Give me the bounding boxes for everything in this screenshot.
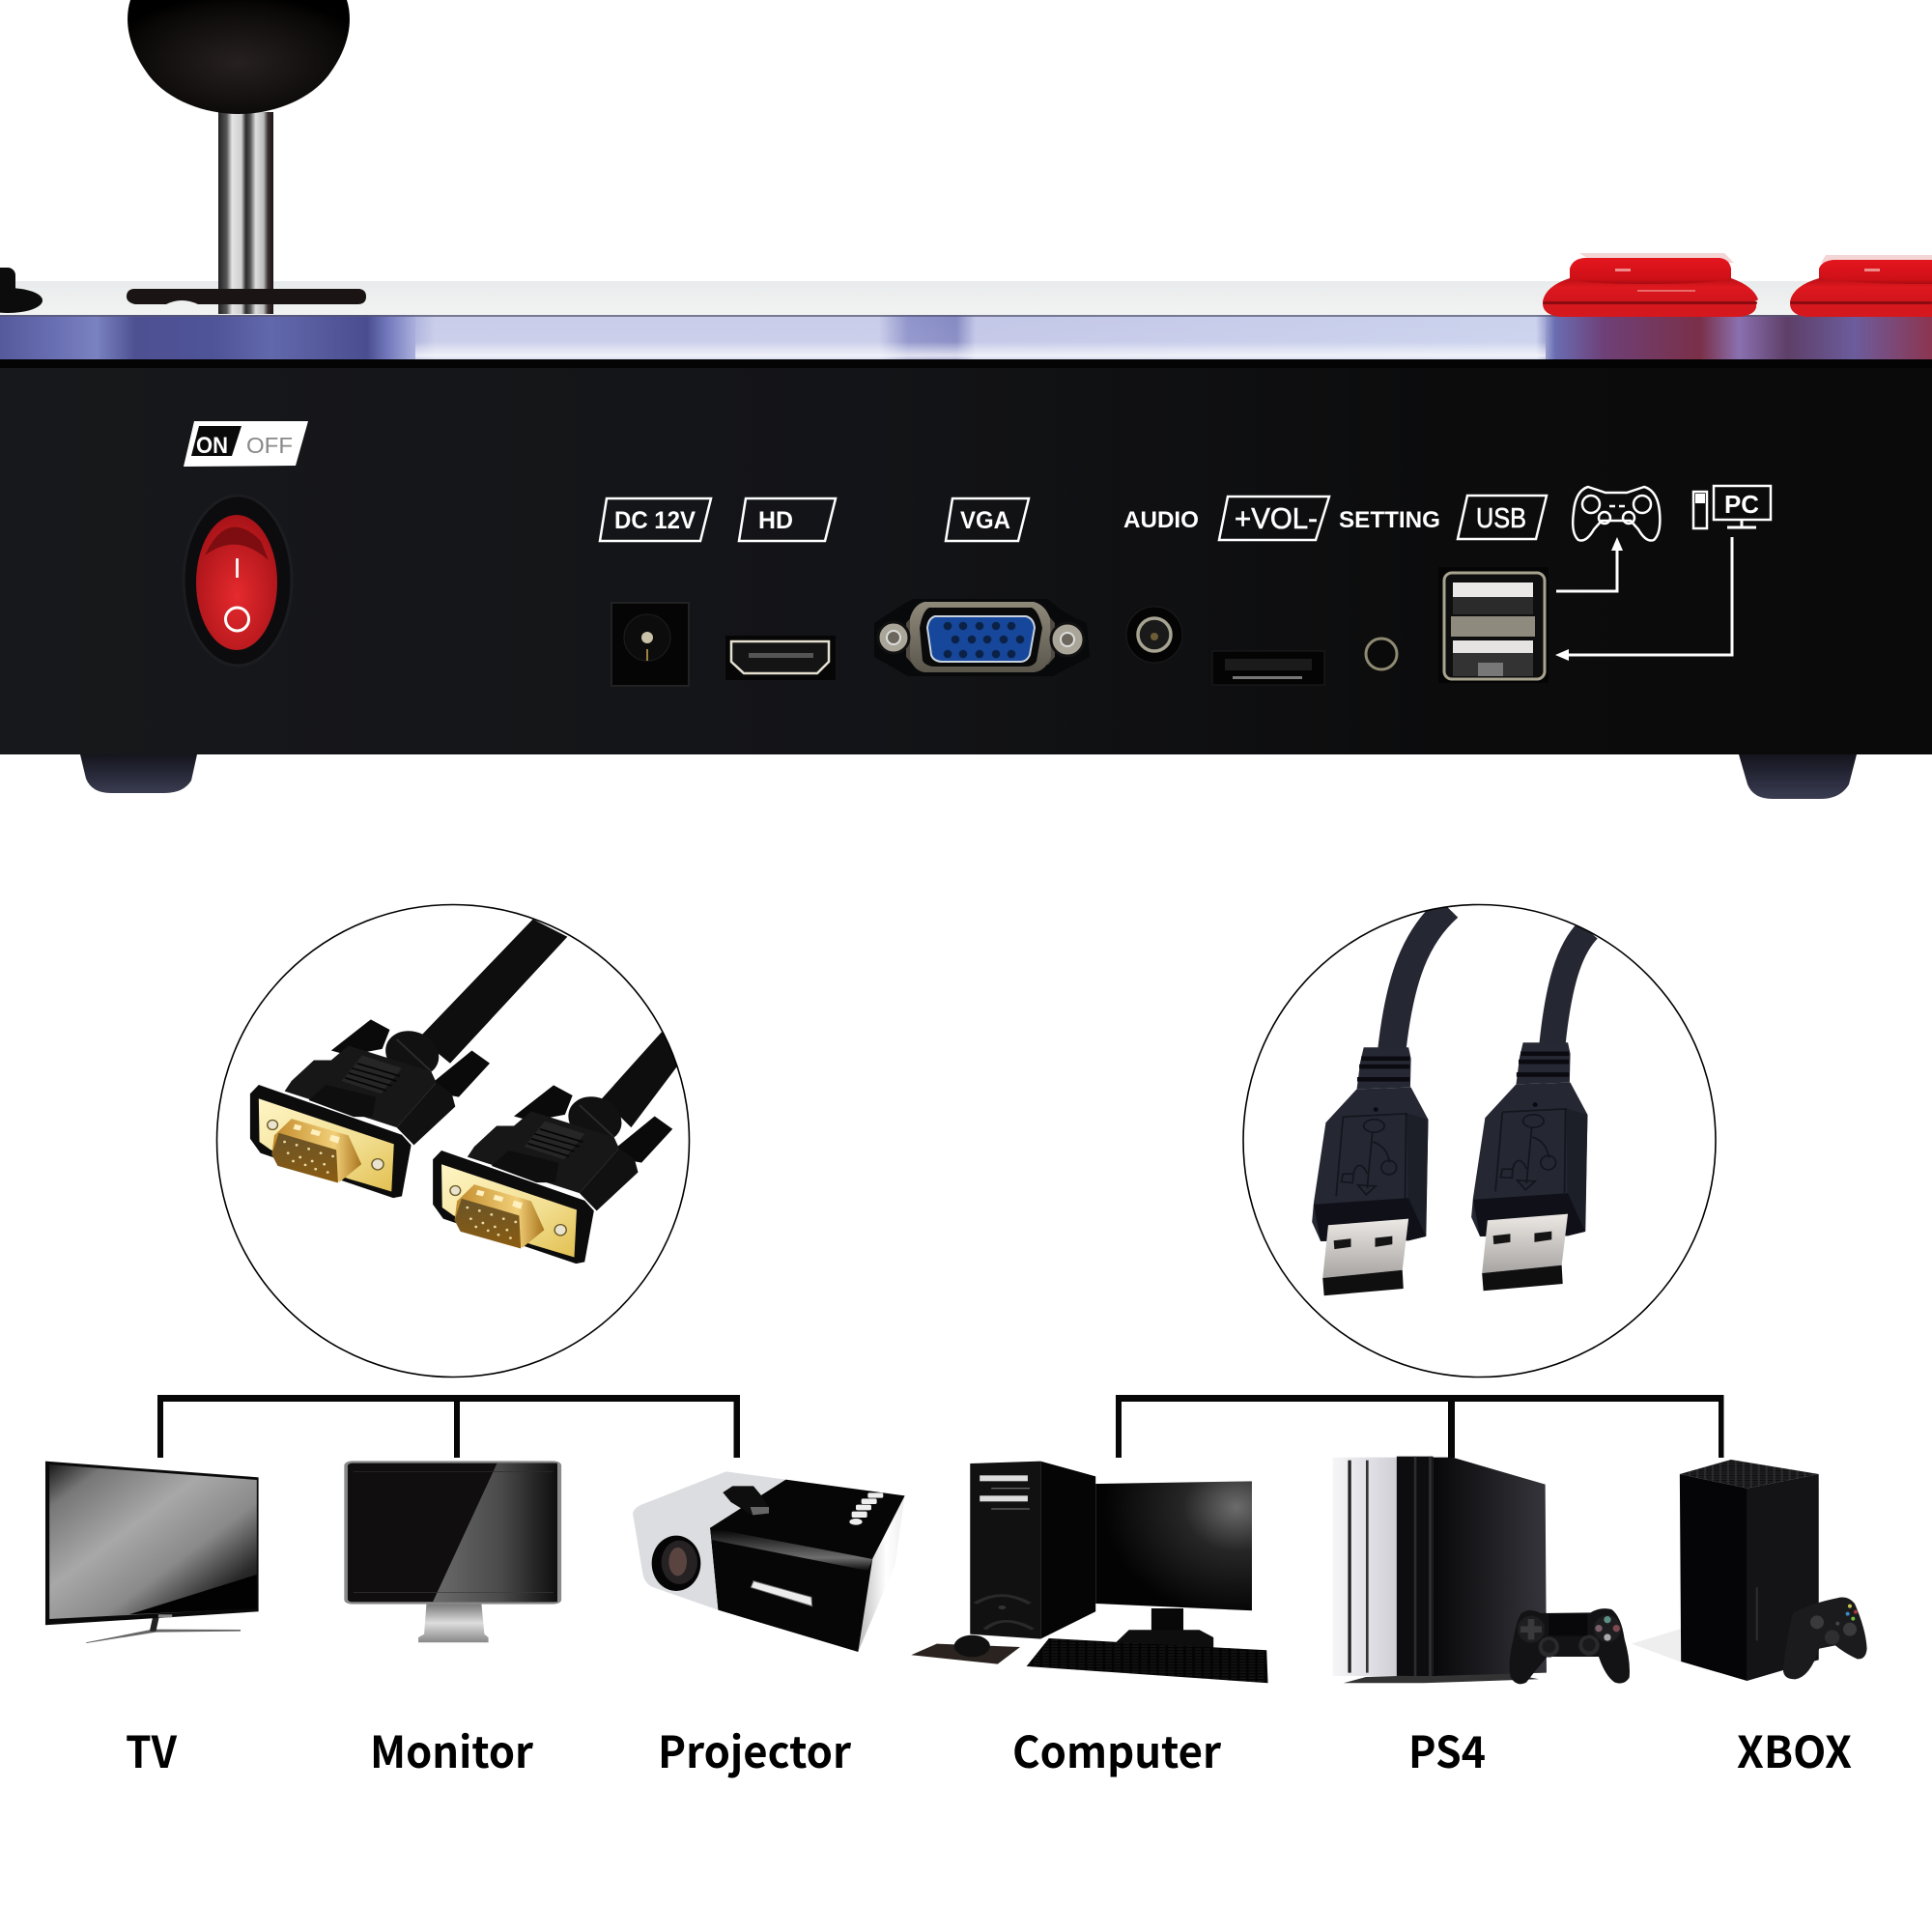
port: audio jack <box>1126 607 1182 663</box>
icon: gamepad <box>1573 487 1660 541</box>
first USB cable <box>1392 908 1448 1049</box>
on/off label: OFF <box>246 433 293 458</box>
top plate <box>0 281 1932 316</box>
bracket: USB devices <box>1116 1395 1723 1458</box>
icon: monitor <box>344 1461 561 1642</box>
USB cables image <box>1312 908 1588 1295</box>
PS4 controller <box>1509 1608 1630 1684</box>
icon: computer <box>911 1462 1268 1683</box>
label: VGA: VGA <box>960 507 1010 534</box>
label: SETTING: SETTING <box>1339 507 1440 533</box>
device icons: computer and consoles <box>911 1457 1819 1683</box>
port: setting hole <box>1366 639 1397 669</box>
first USB plug <box>1312 1047 1428 1295</box>
label: DC 12V: DC 12V <box>614 507 696 534</box>
port: VGA <box>874 599 1090 676</box>
label: Projector: Projector <box>658 1718 851 1780</box>
label: Computer: Computer <box>1012 1718 1221 1780</box>
projector white front <box>633 1471 785 1610</box>
circle outline <box>216 904 690 1378</box>
power rocker switch <box>184 496 292 666</box>
icon: PS4 console <box>1333 1457 1547 1683</box>
on/off label <box>184 421 308 467</box>
rubber feet <box>80 754 1857 799</box>
second USB cable <box>1552 930 1588 1044</box>
red arcade buttons <box>1543 253 1932 317</box>
projector black shell <box>710 1480 905 1652</box>
PS4 and XBOX controllers <box>1509 1597 1867 1684</box>
port: HDMI <box>725 636 836 680</box>
label: TV: TV <box>126 1718 178 1780</box>
joystick <box>127 0 366 314</box>
circle outline <box>1243 904 1716 1378</box>
label: HD <box>739 498 836 541</box>
label: Monitor: Monitor <box>370 1718 533 1780</box>
right foot <box>1739 754 1857 799</box>
button one <box>1543 253 1758 317</box>
small black button at left edge <box>0 268 43 313</box>
joystick shaft <box>218 112 273 314</box>
projector buttons <box>849 1492 883 1525</box>
device icons: TV and monitor <box>45 1461 561 1643</box>
label: USB <box>1458 496 1547 539</box>
joystick ball <box>128 0 350 114</box>
first VGA cable <box>419 920 567 1064</box>
label: DC 12V <box>600 498 711 541</box>
icon: TV <box>45 1462 259 1643</box>
projector highlight band <box>710 1528 872 1571</box>
first VGA plug <box>250 1019 490 1198</box>
VGA cables image <box>250 920 679 1264</box>
black body panel <box>0 359 1932 754</box>
projector right face <box>858 1495 905 1652</box>
port: volume slot <box>1212 651 1324 685</box>
circle: VGA cable <box>216 904 690 1378</box>
second VGA cable <box>602 1032 679 1127</box>
label: +VOL- <box>1219 497 1329 540</box>
second USB plug <box>1471 1042 1587 1291</box>
projector lens <box>652 1536 700 1591</box>
label: XBOX: XBOX <box>1737 1718 1852 1780</box>
on/off label: ON <box>196 433 228 459</box>
panel: arcade console rear view <box>0 0 1932 799</box>
icon: XBOX console <box>1632 1460 1819 1681</box>
projector focus knob <box>723 1486 770 1515</box>
XBOX controller <box>1783 1597 1867 1679</box>
joystick mounting disc <box>127 289 366 304</box>
arrow: PC to USB <box>1555 537 1732 661</box>
computer monitor <box>1095 1481 1252 1648</box>
label: HD: HD <box>758 507 793 534</box>
icon: projector <box>633 1471 905 1652</box>
label: USB: USB <box>1476 503 1526 534</box>
second VGA plug <box>433 1085 672 1264</box>
icon: PC <box>1693 486 1771 528</box>
label: PS4: PS4 <box>1408 1718 1486 1780</box>
icon: PC: PC <box>1724 490 1759 519</box>
label: AUDIO: AUDIO <box>1123 507 1199 533</box>
button two <box>1790 255 1932 317</box>
computer tower <box>970 1462 1095 1639</box>
label: VGA <box>946 498 1029 541</box>
acrylic lit edge <box>0 315 1932 359</box>
port: dual USB <box>1438 567 1548 683</box>
circle: USB cable <box>1243 904 1716 1378</box>
projector slot <box>751 1581 812 1606</box>
label: +VOL-: +VOL- <box>1235 501 1318 535</box>
left foot <box>80 754 197 793</box>
mouse and pad <box>911 1635 1020 1664</box>
port: DC jack <box>611 603 689 686</box>
keyboard <box>1027 1638 1268 1683</box>
arrow: USB to gamepad <box>1556 537 1623 591</box>
bracket: VGA displays <box>157 1395 740 1458</box>
